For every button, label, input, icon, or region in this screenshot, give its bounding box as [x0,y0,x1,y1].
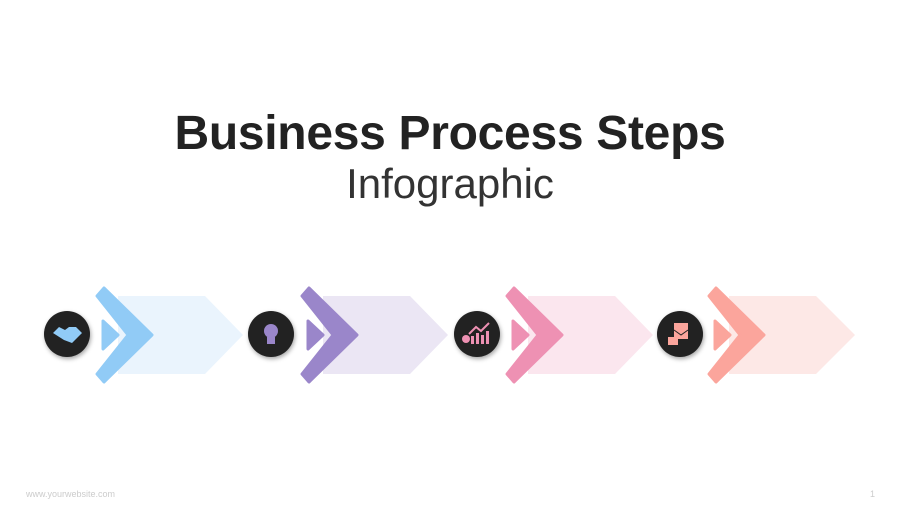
step 2 [248,288,448,382]
arrow body 3 [528,296,653,374]
icon circle: handshake [44,311,90,357]
arrow body 2 [323,296,448,374]
step 4 [657,288,855,382]
arrow body 1 [118,296,243,374]
icon circle: mail [657,311,703,357]
triangle 1 [103,321,118,349]
chevron 3 [507,288,562,382]
subtitle: Infographic [346,160,554,207]
triangle 4 [715,321,730,349]
chevron 2 [302,288,357,382]
arrow body 4 [729,296,855,374]
title: Business Process Steps [174,107,726,160]
triangle 3 [513,321,528,349]
step 3 [454,288,653,382]
icon circle: lightbulb [248,311,294,357]
triangle 2 [308,321,323,349]
chevron 4 [709,288,764,382]
icon circle: growth chart [454,311,500,357]
step 1 [44,288,243,382]
page number: 1 [870,489,875,499]
chevron 1 [97,288,152,382]
footer url: www.yourwebsite.com [26,489,115,499]
